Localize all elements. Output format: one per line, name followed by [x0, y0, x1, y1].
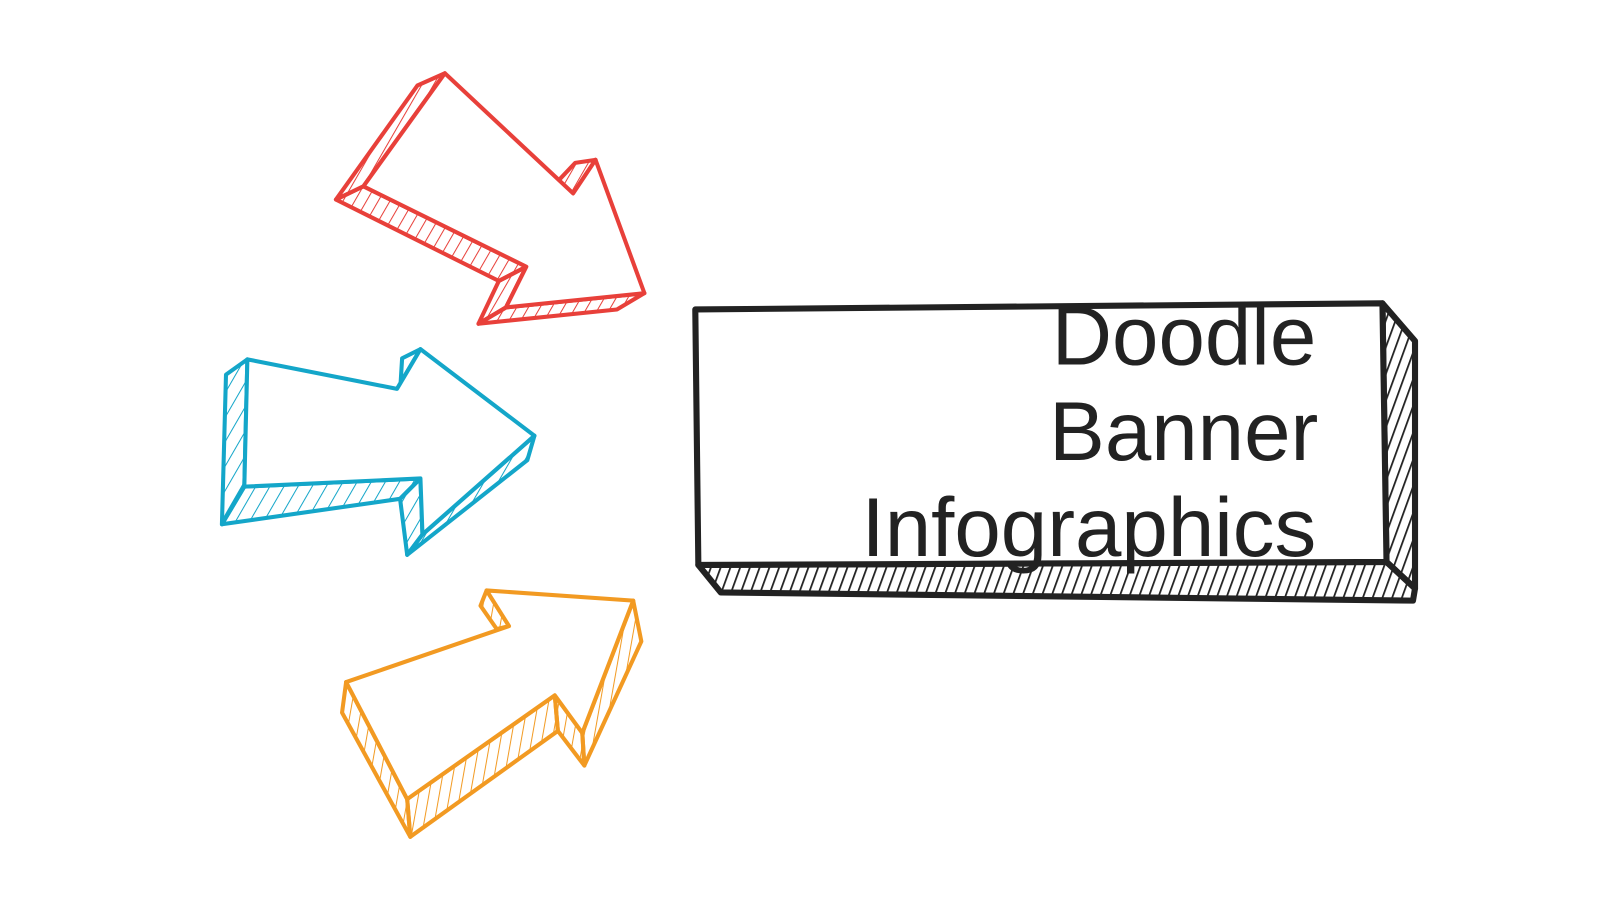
title text: Doodle [1052, 288, 1316, 382]
title text [862, 288, 1318, 574]
banner box [695, 303, 1415, 601]
arrow: red [336, 73, 644, 324]
title text: Banner [1049, 384, 1318, 478]
arrow: orange [342, 590, 641, 837]
title text: Infographics [862, 480, 1316, 574]
infographic content [222, 73, 1415, 837]
arrow: blue [222, 349, 534, 555]
